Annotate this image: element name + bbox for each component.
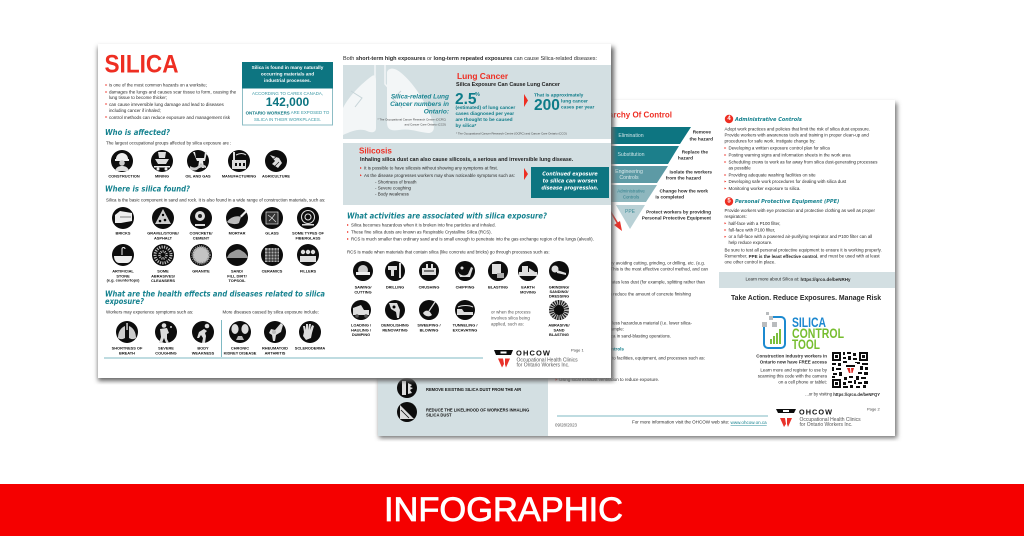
callout: continued exposure: Continued exposure bbox=[542, 172, 598, 178]
icon: fiberglass: FIBERGLASS bbox=[295, 236, 321, 240]
icon: demolishing, renovating: RENOVATING bbox=[382, 328, 408, 332]
icon: sawing, cutting bbox=[353, 261, 373, 294]
footer divider bbox=[557, 416, 768, 417]
icon: artificial stone bbox=[107, 244, 140, 282]
icon: rheumatoid arthritis: ARTHRITIS bbox=[265, 350, 286, 356]
text block: Ontario numbers: and Cancer Care Ontario (CCO) bbox=[405, 122, 446, 126]
icon: shortness of breath bbox=[112, 321, 143, 356]
text block: control details: This is the most effective control method, and can bbox=[610, 266, 709, 272]
section: health effects: Workers may experience symptoms such as: bbox=[106, 310, 193, 314]
pyramid level: substitution: Substitution bbox=[617, 152, 645, 158]
statistic: 200 cases: 200 bbox=[534, 97, 560, 114]
icon: number 5 bbox=[725, 197, 733, 206]
arrow bbox=[524, 168, 528, 180]
text block: free access: Construction Industry workers in bbox=[756, 354, 827, 358]
page number 1: Page 1 bbox=[571, 348, 584, 352]
icon: ceramics bbox=[261, 244, 283, 274]
icon: abrasives, cleansers bbox=[151, 244, 176, 283]
pyramid level: engineering controls: Controls bbox=[619, 175, 639, 181]
icon: concrete, cement bbox=[190, 207, 213, 240]
icon: fiberglass bbox=[292, 207, 325, 240]
text block: or when the process: involves silica being bbox=[491, 316, 530, 320]
statistic: 2.5 percent: (estimated) of lung cancer bbox=[456, 105, 515, 111]
icon: blasting: BLASTING bbox=[488, 284, 508, 290]
pyramid labels: the hazard bbox=[690, 136, 713, 142]
heading: who is affected: Who is affected? bbox=[105, 128, 171, 137]
icon: abrasive sand blasting: ABRASIVE/ bbox=[548, 322, 571, 328]
icon: fillers bbox=[297, 244, 319, 274]
icon: loading, hauling, dumping: DUMPING bbox=[352, 332, 370, 337]
icon: number 4 bbox=[725, 115, 733, 123]
icon: mortar: MORTAR bbox=[229, 230, 246, 236]
section: administrative controls: Monitoring worker exposure to silica. bbox=[728, 186, 801, 191]
text block: free access: on a cell phone or tablet: bbox=[778, 380, 827, 384]
icon: severe coughing bbox=[155, 321, 177, 356]
icon: gravel, stone, asphalt: GRAVEL/STONE/ bbox=[147, 230, 180, 236]
text block: free access bbox=[756, 354, 828, 384]
text block: or when the process bbox=[491, 310, 531, 326]
icon: earth moving: MOVING bbox=[520, 290, 536, 294]
section: health effects: exposure? bbox=[105, 297, 145, 306]
pyramid level: elimination: Elimination bbox=[618, 133, 644, 139]
pyramid level: engineering controls: Engineering bbox=[615, 169, 643, 175]
banner bbox=[0, 484, 1024, 536]
section: where is silica found: Silica is the basic component in sand and rock. It is also found in a wide range of construction materials, such as: bbox=[106, 198, 325, 202]
icon: loading, hauling, dumping: HAULING / bbox=[351, 328, 372, 332]
icon: sand, fill dirt, topsoil: TOPSOIL bbox=[228, 278, 246, 283]
icon: abrasive sand blasting: BLASTING bbox=[549, 332, 569, 337]
section: administrative controls: Providing adequate washing facilities on site bbox=[728, 172, 816, 178]
icon: bricks bbox=[112, 207, 134, 236]
panel: engineering goal, reduce inhalation bbox=[397, 402, 529, 422]
panel: silicosis: It is possible to have silicosis without showing any symptoms at first. bbox=[364, 166, 498, 170]
pyramid level: administrative controls bbox=[590, 185, 657, 202]
pyramid labels: Personal Protective Equipment bbox=[642, 216, 711, 220]
pyramid labels: is completed bbox=[655, 194, 684, 200]
pyramid level: substitution bbox=[570, 146, 679, 164]
icon: concrete, cement: CONCRETE/ bbox=[190, 230, 213, 236]
panel: learn more link: Learn more about Silica at: https://qrco.de/beNRHy bbox=[745, 276, 851, 282]
heading: personal protective equipment: Personal Protective Equipment (PPE) bbox=[735, 199, 839, 205]
icon: chronic kidney disease: KIDNEY DISEASE bbox=[224, 350, 257, 356]
QR code bbox=[832, 352, 868, 388]
page number 2: Page 2 bbox=[867, 406, 880, 412]
section: administrative controls: Developing a written exposure control plan for silica bbox=[728, 146, 830, 150]
section: administrative controls: Adopt work practices and policies that limit the risk of silica dust exposure. bbox=[724, 126, 870, 132]
text block: control details: Using local exhaust ventilation to reduce exposure. bbox=[559, 377, 659, 382]
icon: agriculture bbox=[262, 150, 290, 178]
callout: 142,000 Ontario workers: Silica is found in many naturally bbox=[252, 65, 324, 70]
text block: Ontario numbers: Silica-related Lung bbox=[391, 94, 449, 100]
text block: control details: Engineering Controls bbox=[577, 346, 624, 352]
icon: manufacturing bbox=[222, 150, 256, 178]
panel: silicosis: - Body weakness bbox=[375, 192, 410, 196]
icon: drilling: DRILLING bbox=[386, 284, 404, 290]
icon: sand, fill dirt, topsoil: FILL DIRT/ bbox=[227, 274, 248, 278]
heading: take action: Take Action. Reduce Exposures. Manage Risk bbox=[731, 295, 881, 302]
logo: silica control tool: TOOL bbox=[792, 337, 820, 352]
panel: silicosis: - Severe coughing bbox=[375, 186, 412, 190]
section: administrative controls bbox=[724, 115, 878, 191]
section: personal protective equipment: Remember, PPE is the least effective control, and must be used with at least bbox=[724, 254, 880, 258]
icon: fillers: FILLERS bbox=[300, 268, 317, 274]
pyramid labels: Replace the bbox=[682, 150, 708, 154]
callout: 142,000 Ontario workers: SILICA IN THEIR WORKPLACES. bbox=[254, 117, 321, 122]
text block: Ontario numbers: Cancer numbers in bbox=[390, 101, 449, 108]
pyramid labels: Change how the work bbox=[660, 188, 708, 194]
icon: chipping bbox=[455, 261, 475, 290]
text block: or when the process: or when the process bbox=[491, 310, 531, 314]
panel: silicosis: Inhaling silica dust can also cause silicosis, a serious and irreversible lung disease. bbox=[360, 157, 574, 163]
callout: continued exposure: disease progression. bbox=[541, 186, 599, 192]
statistic: 2.5 percent: % bbox=[475, 92, 480, 98]
section: health effects bbox=[104, 290, 483, 358]
pyramid labels: Remove bbox=[693, 130, 711, 134]
icon: tunneling, excavating bbox=[453, 300, 478, 332]
icon: artificial stone: (e.g. countertops) bbox=[107, 278, 140, 282]
logo: silica control tool: CONTROL bbox=[792, 326, 844, 341]
text block: silica bullets: including cancer if inhaled; bbox=[109, 108, 161, 113]
section: personal protective equipment: full-face with P100 filter, bbox=[728, 228, 775, 232]
page 1 document bbox=[98, 44, 614, 381]
arrow bbox=[524, 94, 528, 107]
text block: control details bbox=[556, 260, 709, 382]
pyramid level: PPE: PPE bbox=[625, 209, 636, 215]
statistic: 200 cases bbox=[534, 92, 594, 114]
section: administrative controls: procedures for safe work. Instigate change by: bbox=[724, 138, 816, 144]
icon: loading, hauling, dumping bbox=[351, 300, 372, 337]
section: where is silica found bbox=[105, 184, 325, 283]
link: visit short URL: ...or by visiting https://qrco.de/beNFQY bbox=[805, 392, 880, 396]
icon: shortness of breath: SHORTNESS OF bbox=[112, 346, 143, 350]
icon: rheumatoid arthritis bbox=[262, 321, 288, 356]
statistic: 200 cases: That is approximately bbox=[534, 92, 584, 98]
icon: abrasives, cleansers: ABRASIVES/ bbox=[151, 274, 176, 278]
section: personal protective equipment: one other control in place. bbox=[724, 260, 776, 264]
icon: abrasive sand blasting bbox=[548, 300, 571, 337]
icon: granite: GRANITE bbox=[192, 268, 210, 274]
icon: abrasive sand blasting: SAND bbox=[553, 328, 565, 332]
section: activities: Silica becomes hazardous when it is broken into fine particles and inhaled. bbox=[351, 222, 496, 228]
panel: learn more link bbox=[719, 272, 895, 288]
panel: engineering goal, reduce inhalation: REDUCE THE LIKELIHOOD OF WORKERS INHALING bbox=[426, 408, 529, 412]
text block: control details: Plan the pour to reduce the amount of concrete finishing bbox=[581, 292, 692, 296]
icon: number 5: 5 bbox=[727, 198, 731, 204]
panel: engineering goal, remove silica dust: REMOVE EXISTING SILICA DUST FROM THE AIR bbox=[426, 387, 521, 392]
logo: OHCOW page 2 bbox=[776, 408, 861, 428]
section: who is affected: The largest occupational groups affected by silica exposure are : bbox=[106, 140, 231, 146]
icon: crushing bbox=[419, 261, 439, 290]
text block: or when the process: applied, such as: bbox=[491, 322, 524, 326]
icon: concrete, cement: CEMENT bbox=[193, 236, 210, 240]
section: personal protective equipment: Provide workers with eye protection and protective clothing as well as proper bbox=[724, 208, 875, 213]
section: personal protective equipment: respirators: bbox=[724, 214, 747, 219]
heading: hierarchy of control: Hierarchy Of Control bbox=[593, 110, 672, 120]
callout: continued exposure: to silica can worsen bbox=[543, 178, 598, 184]
section: activities: These fine silica dusts are known as Respirable Crystalline Silica (RCS). bbox=[351, 230, 492, 234]
icon: agriculture: AGRICULTURE bbox=[262, 174, 290, 178]
text block: control details: Use methods that generates less dust (for example, splitting rather than bbox=[564, 280, 706, 284]
arrow: decreasing effectiveness bbox=[609, 209, 622, 231]
statistic: 2.5 percent: * The Occupational Cancer Research Centre (OCRC) and Cancer Care Ontario (CCO) bbox=[456, 132, 567, 136]
text block: silica bullets: control methods can reduce exposure and management risk bbox=[109, 115, 231, 120]
icon: number 4: 4 bbox=[727, 116, 731, 122]
icon: sand, fill dirt, topsoil bbox=[226, 244, 248, 283]
icon: artificial stone: STONE bbox=[116, 274, 130, 278]
panel: lung cancer bbox=[343, 65, 611, 139]
pyramid labels: hazard bbox=[678, 156, 693, 160]
section: who is affected bbox=[105, 128, 290, 178]
icon: sweeping, blowing: SWEEPING / bbox=[417, 322, 441, 328]
text block: control details: Substitution by avoiding cutting, grinding, or drilling, etc. (e.g. bbox=[585, 260, 705, 266]
logo: silica control tool: SILICA bbox=[792, 315, 826, 330]
panel: engineering goal, remove silica dust bbox=[397, 378, 521, 398]
icon: body weakness bbox=[192, 321, 215, 356]
icon: manufacturing: MANUFACTURING bbox=[222, 174, 256, 178]
statistic: 200 cases: cases per year bbox=[561, 104, 594, 110]
logo: OHCOW page 1: Occupational Health Clinics bbox=[516, 358, 578, 364]
pyramid labels: Protect workers by providing bbox=[646, 210, 711, 214]
callout: 142,000 Ontario workers: ONTARIO WORKERS ARE EXPOSED TO bbox=[246, 110, 330, 115]
icon: bricks: BRICKS bbox=[116, 230, 131, 236]
section: personal protective equipment: Be sure to test all personal protective equipment to ensure it is working properly. bbox=[724, 248, 882, 252]
section: administrative controls: Provide workers with awareness tools and training in proper clean-up and bbox=[724, 132, 869, 138]
icon: grinding, sanding, dressing: DRESSING bbox=[549, 294, 569, 298]
icon: severe coughing: SEVERE bbox=[158, 346, 174, 350]
footer link: For more information visit the OHCOW web site: www.ohcow.on.ca bbox=[632, 420, 767, 424]
heading: where is silica found: Where is silica found? bbox=[105, 184, 191, 194]
title: SILICA bbox=[104, 50, 178, 78]
callout: 142,000 Ontario workers: industrial processes. bbox=[264, 78, 311, 83]
section: personal protective equipment: help reduce exposure. bbox=[728, 240, 772, 245]
text block: silica bullets: is one of the most common hazards on a worksite; bbox=[109, 82, 207, 88]
heading: activities: What activities are associated with silica exposure? bbox=[347, 212, 548, 220]
icon: demolishing, renovating bbox=[381, 300, 409, 332]
section: activities bbox=[347, 212, 594, 337]
statistic: 200 cases: lung cancer bbox=[561, 98, 588, 104]
logo: OHCOW page 2: for Ontario Workers Inc. bbox=[800, 422, 852, 428]
section: administrative controls: Posting warning signs and information sheets in the work area bbox=[728, 152, 851, 158]
icon: gravel, stone, asphalt bbox=[147, 207, 180, 240]
section: personal protective equipment: half-face with a P100 filter, bbox=[728, 221, 781, 226]
icon: rheumatoid arthritis: RHEUMATOID bbox=[262, 346, 288, 350]
text block: Ontario numbers: Ontario: bbox=[424, 108, 449, 116]
statistic: 2.5 percent: 2.5 bbox=[455, 91, 477, 108]
text block: free access: scanning this code with the camera bbox=[758, 374, 828, 378]
icon: mortar bbox=[226, 207, 248, 236]
icon: drilling bbox=[385, 261, 405, 290]
statistic: 2.5 percent: by silica* bbox=[456, 123, 476, 129]
section: health effects: More diseases caused by silica exposure include: bbox=[222, 310, 319, 314]
callout: 142,000 Ontario workers: 142,000 bbox=[266, 95, 310, 109]
logo: OHCOW page 2: Occupational Health Clinics bbox=[800, 417, 861, 423]
heading: silicosis: Silicosis bbox=[359, 146, 392, 156]
icon: mining: MINING bbox=[155, 174, 169, 178]
icon: body weakness: WEAKNESS bbox=[192, 350, 215, 356]
icon: body weakness: BODY bbox=[197, 346, 209, 350]
text block: Ontario numbers bbox=[377, 94, 449, 126]
icon: grinding, sanding, dressing: SANDING/ bbox=[549, 289, 569, 294]
text block: silica bullets: damages the lungs and causes scar tissue to form, causing the bbox=[109, 90, 237, 94]
pyramid labels bbox=[642, 130, 713, 220]
icon: crushing: CRUSHING bbox=[419, 284, 439, 290]
icon: sawing, cutting: CUTTING bbox=[354, 290, 372, 294]
panel: silicosis: As the disease progresses workers may show noticeable symptoms such as: bbox=[364, 173, 515, 178]
callout: 142,000 Ontario workers: occurring materials and bbox=[261, 72, 314, 76]
logo: OHCOW page 2: OHCOW bbox=[799, 408, 832, 416]
text block: free access: Learn more and register to use by bbox=[760, 368, 828, 372]
logo: silica control tool bbox=[762, 312, 844, 352]
heading: lung cancer: Lung Cancer bbox=[457, 71, 509, 81]
icon: tunneling, excavating: EXCAVATING bbox=[453, 328, 477, 332]
section: administrative controls: Scheduling crews to work as far away from silica dust-generating processes bbox=[728, 160, 878, 164]
icon: demolishing, renovating: DEMOLISHING bbox=[381, 322, 409, 328]
icon: construction: CONSTRUCTION bbox=[108, 174, 140, 178]
text block: silica bullets: lung tissue to become thicker; bbox=[109, 95, 167, 100]
text block: control details: Substitute with a safer, less hazardous material (i.e. lower silica- bbox=[566, 320, 693, 326]
intro statement: Both short-term high exposures or long-term repeated exposures can cause Silica-related diseases: bbox=[343, 56, 597, 62]
pyramid level: elimination bbox=[560, 127, 691, 144]
heading: administrative controls: Administrative Controls bbox=[734, 117, 802, 123]
pyramid level: administrative controls: Administrative bbox=[617, 188, 645, 194]
text block: Ontario numbers: * The Occupational Cancer Research Centre (OCRC) bbox=[377, 118, 446, 122]
icon: granite bbox=[190, 244, 212, 274]
icon: earth moving bbox=[518, 261, 538, 294]
logo: OHCOW page 1: OHCOW bbox=[516, 348, 551, 358]
icon: sand, fill dirt, topsoil: SAND/ bbox=[231, 268, 244, 274]
icon: artificial stone: ARTIFICIAL bbox=[112, 268, 134, 274]
icon: abrasives, cleansers: SOME bbox=[157, 268, 169, 274]
icon: chronic kidney disease bbox=[224, 321, 257, 356]
pyramid: hierarchy of control bbox=[560, 127, 713, 229]
icon: scleroderma bbox=[295, 321, 325, 350]
text block: control details: Make changes to facilities, equipment, and processes such as: bbox=[582, 356, 705, 360]
icon: chronic kidney disease: CHRONIC bbox=[231, 346, 249, 350]
statistic: 2.5 percent: cases diagnosed per year bbox=[456, 111, 514, 117]
section: administrative controls: as possible bbox=[728, 166, 751, 170]
icon: loading, hauling, dumping: LOADING / bbox=[351, 322, 372, 328]
icon: scleroderma: SCLERODERMA bbox=[295, 346, 325, 350]
icon: blasting bbox=[488, 261, 508, 290]
panel: lung cancer: Silica Exposure Can Cause Lung Cancer bbox=[456, 82, 561, 88]
pyramid labels: Isolate the workers bbox=[670, 170, 712, 174]
section: administrative controls: Developing safe work procedures for dealing with silica dust bbox=[728, 179, 847, 184]
date: 09/28/2023 bbox=[555, 422, 578, 428]
statistic: 2.5 percent: are thought to be caused bbox=[456, 117, 513, 123]
pyramid level: PPE bbox=[616, 205, 645, 229]
icon: fiberglass: SOME TYPES OF bbox=[292, 230, 325, 236]
pyramid level: administrative controls: Controls bbox=[623, 194, 640, 200]
icon: oil and gas: OIL AND GAS bbox=[185, 174, 211, 178]
pyramid labels: from the hazard bbox=[666, 176, 701, 180]
icon: abrasives, cleansers: CLEANSERS bbox=[151, 278, 175, 283]
section: activities: RCS is much smaller than ordinary sand and is small enough to penetrate into the gas exchange region of the lungs (alveoli). bbox=[351, 236, 594, 242]
page 2 document bbox=[378, 100, 897, 438]
panel: silicosis bbox=[343, 143, 611, 205]
callout: 142,000 Ontario workers: ACCORDING TO CAREX CANADA, bbox=[252, 91, 323, 96]
icon: sweeping, blowing: BLOWING bbox=[420, 328, 438, 332]
icon: sawing, cutting: SAWING/ bbox=[355, 284, 372, 290]
text block: silica bullets bbox=[106, 82, 237, 120]
text block: control details: for example: bbox=[600, 326, 624, 332]
logo: OHCOW page 1: for Ontario Workers Inc. bbox=[516, 363, 569, 369]
icon: gravel, stone, asphalt: ASPHALT bbox=[154, 236, 173, 240]
text block: control details: Replace silica in sand-blasting operations. bbox=[588, 334, 671, 338]
heading: health effects: What are the health effects and diseases related to silica bbox=[105, 290, 325, 298]
icon: earth moving: EARTH bbox=[521, 284, 535, 290]
pyramid level: engineering controls bbox=[580, 166, 668, 183]
panel: silicosis: - Shortness of breath bbox=[375, 180, 417, 184]
panel: engineering goal, reduce inhalation: SILICA DUST bbox=[426, 412, 452, 418]
icon: grinding, sanding, dressing bbox=[549, 261, 570, 298]
icon: construction bbox=[108, 150, 140, 178]
statistic: 2.5 percent bbox=[455, 91, 567, 136]
icon: glass bbox=[261, 207, 283, 236]
icon: tunneling, excavating: TUNNELING / bbox=[453, 322, 478, 328]
callout: 142,000 Ontario workers bbox=[242, 62, 333, 125]
icon: grinding, sanding, dressing: GRINDING/ bbox=[549, 284, 570, 290]
section: activities: RCS is made when materials that contain silica (like concrete and bricks) go through processes such as: bbox=[347, 250, 550, 254]
text block: free access: Ontario now have FREE access bbox=[760, 360, 827, 364]
icon: mining bbox=[151, 150, 173, 178]
banner: INFOGRAPHIC bbox=[384, 491, 623, 529]
icon: shortness of breath: BREATH bbox=[119, 350, 135, 356]
icon: severe coughing: COUGHING bbox=[155, 350, 177, 356]
text block: silica bullets: can cause irreversible lung damage and lead to diseases bbox=[109, 102, 224, 107]
icon: ceramics: CERAMICS bbox=[262, 268, 283, 274]
icon: chipping: CHIPPING bbox=[456, 284, 474, 290]
callout: continued exposure bbox=[531, 167, 609, 198]
section: personal protective equipment bbox=[724, 197, 882, 264]
icon: sweeping, blowing bbox=[417, 300, 441, 332]
section: personal protective equipment: or a full-face with a powered air-purifying respirator and P100 filter can all bbox=[728, 234, 872, 239]
icon: oil and gas bbox=[185, 150, 211, 178]
icon: glass: GLASS bbox=[265, 230, 279, 236]
lungs illustration bbox=[343, 65, 434, 135]
logo: OHCOW page 1 bbox=[494, 348, 578, 369]
